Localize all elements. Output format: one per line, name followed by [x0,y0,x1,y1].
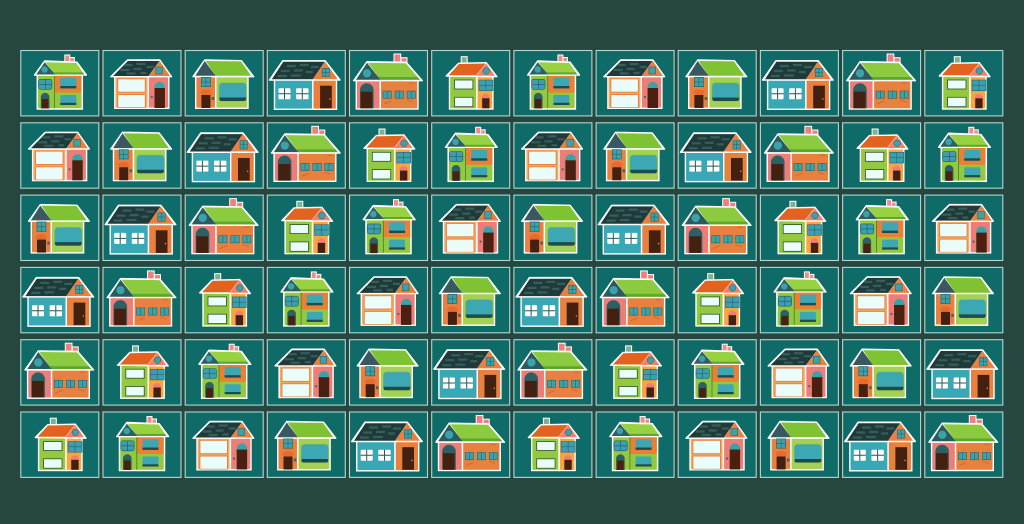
row 4 card 3: orange roof house [185,267,263,333]
row 5 card 1: wide pink and orange house [21,340,99,405]
row 6 card 12: wide pink and orange house [925,412,1003,477]
row 4 card 9: orange roof house [678,267,756,333]
row 5 card 7: wide pink and orange house [514,340,592,405]
row 1 card 10: teal house [760,50,838,116]
row 1 card 4: teal house [267,50,345,116]
row 4 card 1: teal house [21,267,99,333]
row 2 card 9: teal house [678,123,756,188]
row 4 card 6: orange and green house [432,267,510,333]
row 6 card 1: orange roof house [21,412,99,477]
row 2 card 3: teal house [185,123,263,188]
row 1 card 11: wide pink and orange house [843,50,921,116]
row 4 card 5: dark roof house [350,267,428,333]
row 1 card 7: green house [514,50,592,116]
row 6 card 2: green house [103,412,181,477]
row 2 card 7: dark roof house [514,123,592,188]
row 3 card 2: teal house [103,195,181,260]
row 6 card 9: dark roof house [678,412,756,477]
row 3 card 6: dark roof house [432,195,510,260]
row 6 card 5: teal house [350,412,428,477]
row 4 card 8: wide pink and orange house [596,267,674,333]
row 2 card 8: orange and green house [596,123,674,188]
row 4 card 10: green house [760,267,838,333]
row 5 card 2: orange roof house [103,340,181,405]
row 4 card 2: wide pink and orange house [103,267,181,333]
row 6 card 11: teal house [843,412,921,477]
row 6 card 8: green house [596,412,674,477]
row 6 card 4: orange and green house [267,412,345,477]
row 3 card 5: green house [350,195,428,260]
row 5 card 4: dark roof house [267,340,345,405]
row 1 card 1: green house [21,50,99,116]
row 6 card 3: dark roof house [185,412,263,477]
row 2 card 2: orange and green house [103,123,181,188]
row 4 card 4: green house [267,267,345,333]
row 5 card 10: dark roof house [760,340,838,405]
row 6 card 7: orange roof house [514,412,592,477]
row 2 card 1: dark roof house [21,123,99,188]
row 5 card 11: orange and green house [843,340,921,405]
row 3 card 11: green house [843,195,921,260]
row 3 card 10: orange roof house [760,195,838,260]
row 1 card 12: orange roof house [925,50,1003,116]
row 1 card 9: orange and green house [678,50,756,116]
row 5 card 12: teal house [925,340,1003,405]
row 6 card 10: orange and green house [760,412,838,477]
row 3 card 4: orange roof house [267,195,345,260]
row 5 card 5: orange and green house [350,340,428,405]
row 3 card 12: dark roof house [925,195,1003,260]
row 2 card 11: orange roof house [843,123,921,188]
row 1 card 5: wide pink and orange house [350,50,428,116]
row 3 card 9: wide pink and orange house [678,195,756,260]
row 3 card 8: teal house [596,195,674,260]
row 4 card 7: teal house [514,267,592,333]
row 4 card 11: dark roof house [843,267,921,333]
row 3 card 1: orange and green house [21,195,99,260]
row 2 card 5: orange roof house [350,123,428,188]
row 3 card 3: wide pink and orange house [185,195,263,260]
row 2 card 6: green house [432,123,510,188]
row 5 card 8: orange roof house [596,340,674,405]
row 4 card 12: orange and green house [925,267,1003,333]
row 5 card 6: teal house [432,340,510,405]
row 1 card 2: dark roof house [103,50,181,116]
row 1 card 6: orange roof house [432,50,510,116]
row 3 card 7: orange and green house [514,195,592,260]
row 2 card 10: wide pink and orange house [760,123,838,188]
row 6 card 6: wide pink and orange house [432,412,510,477]
row 5 card 3: green house [185,340,263,405]
row 2 card 12: green house [925,123,1003,188]
row 2 card 4: wide pink and orange house [267,123,345,188]
row 1 card 3: orange and green house [185,50,263,116]
row 5 card 9: green house [678,340,756,405]
row 1 card 8: dark roof house [596,50,674,116]
